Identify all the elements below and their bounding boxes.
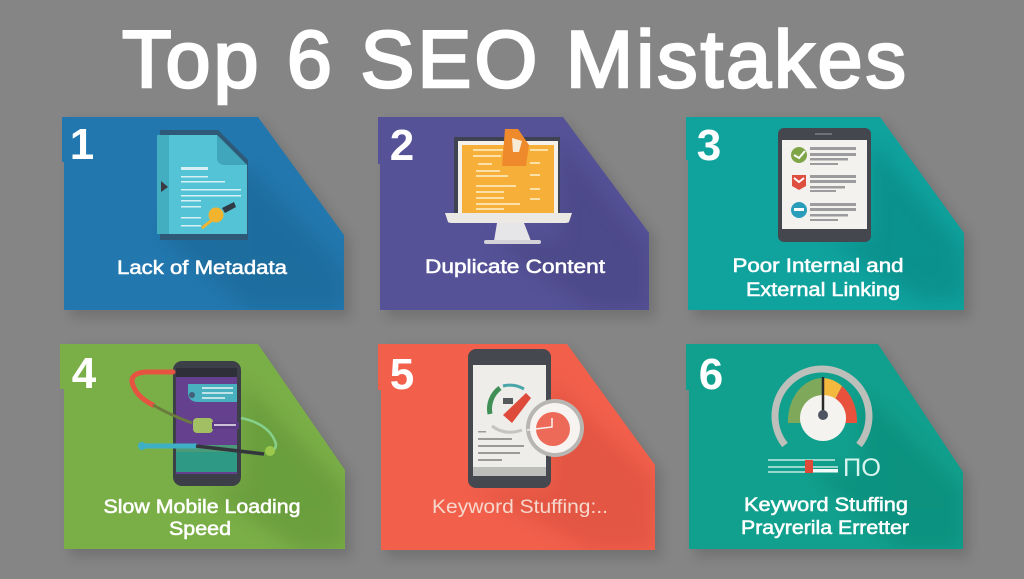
panel: 2 duplicate content: [378, 117, 655, 318]
number 3: 3: [697, 121, 721, 170]
label: Lack of Metadata: [117, 258, 287, 279]
label: [104, 497, 300, 540]
panel: 6 keyword stuffing gauge: [686, 344, 969, 557]
number 6: 6: [699, 350, 723, 399]
icon: phone with gauge and stopwatch: [468, 349, 584, 488]
label: Keyword Stuffing:..: [432, 497, 608, 518]
number 2: 2: [390, 121, 414, 170]
icon: document with key: [157, 130, 248, 240]
icon: monitor with orange document: [445, 129, 572, 244]
icon: speedometer: [768, 369, 881, 482]
label: Speed: [169, 519, 231, 540]
panel: 4 slow mobile: [60, 344, 351, 557]
icon: phone with orbit: [132, 361, 276, 486]
label: External Linking: [746, 280, 900, 301]
label: Slow Mobile Loading: [104, 497, 300, 518]
label: Prayrerila Erretter: [741, 518, 910, 539]
label: [741, 495, 910, 539]
label: Poor Internal and: [732, 256, 904, 277]
small bars with NO mark: ПO: [843, 454, 881, 482]
number 5: 5: [390, 350, 414, 399]
title: Top 6 SEO Mistakes: [122, 15, 906, 105]
label: [732, 256, 904, 301]
panel: 3 linking: [686, 117, 970, 318]
icon: tablet list: [778, 128, 871, 242]
panel: 1 lack of metadata: [62, 117, 350, 318]
label: Keyword Stuffing: [744, 495, 908, 516]
panel: 5 keyword stuffing: [378, 344, 661, 558]
number 4: 4: [72, 349, 97, 398]
label: Duplicate Content: [425, 257, 606, 278]
number 1: 1: [70, 120, 94, 169]
